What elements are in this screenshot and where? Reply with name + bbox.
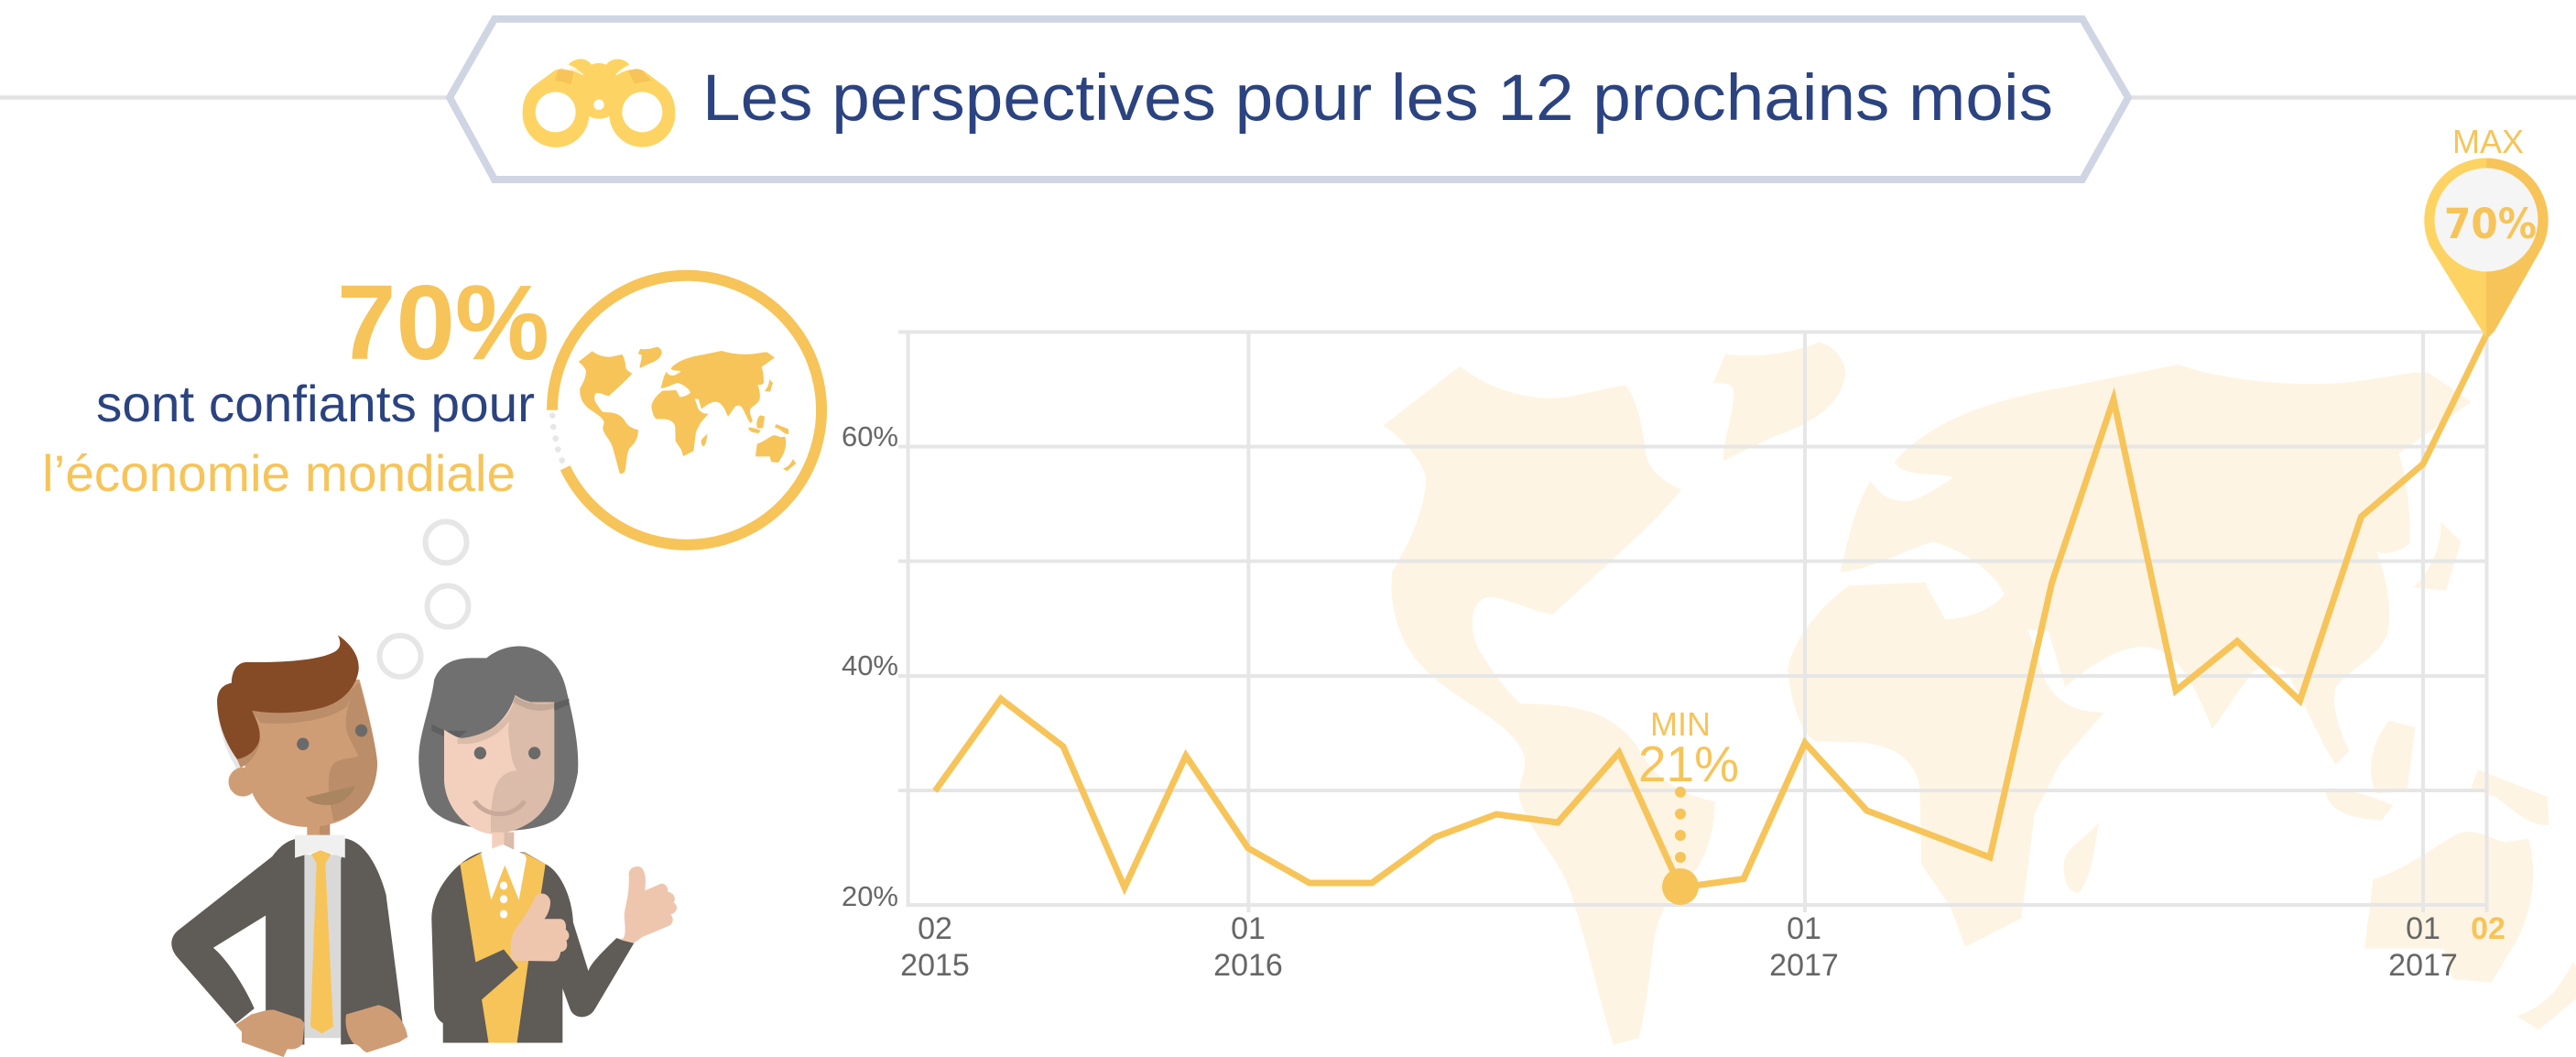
y axis labels: 40%: [842, 649, 898, 681]
callout: maximum 70% pin: [2424, 123, 2549, 338]
thought bubbles: [379, 522, 469, 677]
icon: binoculars: [523, 59, 675, 147]
x axis labels: 02: [2471, 911, 2505, 946]
x axis labels: 2015: [900, 948, 970, 983]
illustration: businesswoman: [418, 647, 677, 1043]
y axis labels: 60%: [842, 420, 898, 452]
data line: [935, 335, 2486, 888]
x axis labels: 2017: [1769, 948, 1839, 983]
x axis labels: [900, 911, 2505, 983]
x axis labels: 2016: [1213, 948, 1283, 983]
title banner: [450, 19, 2128, 180]
icon: globe ring with world map: [549, 276, 821, 545]
callout: maximum 70% pin: 70%: [2444, 200, 2537, 248]
illustration: businessman: [171, 635, 408, 1057]
title text: Les perspectives pour les 12 prochains mois: [702, 62, 2053, 135]
y axis labels: 20%: [842, 880, 898, 912]
line chart: [842, 123, 2549, 983]
x axis labels: 02: [918, 911, 952, 946]
callout: maximum 70% pin: MAX: [2452, 123, 2524, 160]
y axis labels: [842, 420, 898, 912]
x axis labels: 01: [2406, 911, 2440, 946]
callout: minimum 21%: MIN: [1650, 705, 1711, 743]
big percentage: 70%: [337, 263, 549, 382]
callout: minimum 21%: [1638, 705, 1739, 905]
header lines: [0, 95, 2576, 100]
background world map: [1384, 343, 2576, 1045]
x axis labels: 01: [1231, 911, 1266, 946]
x axis labels: 2017: [2388, 948, 2458, 983]
line: l'économie mondiale: l’économie mondiale: [42, 444, 516, 502]
line: sont confiants pour: sont confiants pour: [96, 375, 535, 432]
x axis labels: 01: [1787, 911, 1821, 946]
callout: minimum 21%: 21%: [1638, 736, 1739, 792]
stat text: 70% confident: [42, 263, 549, 502]
